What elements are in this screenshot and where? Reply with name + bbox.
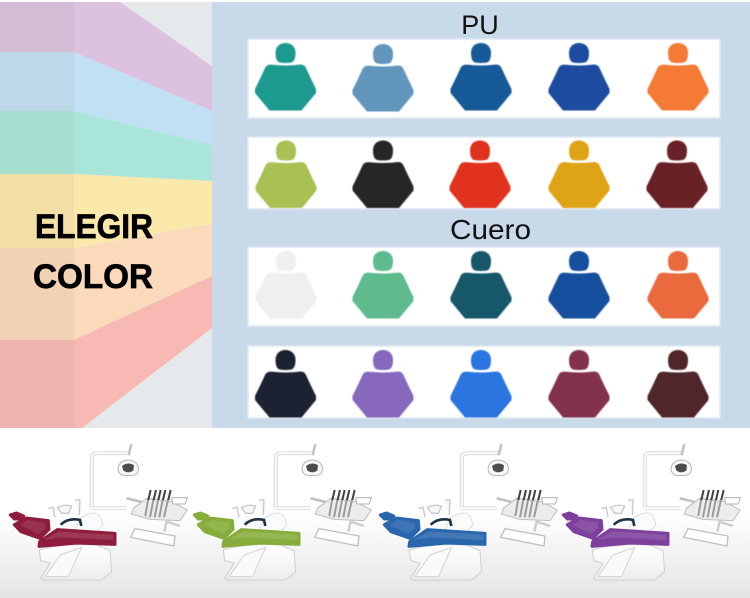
swatch: coral — [648, 251, 708, 318]
dental chair: purple — [563, 444, 740, 580]
swatch: deep teal — [450, 251, 512, 318]
swatch: red — [450, 140, 510, 208]
swatch: wine — [548, 350, 610, 418]
swatch: steel blue — [352, 44, 414, 112]
swatch: maroon — [646, 140, 708, 208]
dental chair: blue — [380, 444, 557, 580]
swatch: mustard — [548, 140, 610, 208]
heading: ELEGIR COLOR: ELEGIR — [35, 208, 153, 246]
panel: PU row 1 — [248, 39, 720, 118]
heading: Cuero: Cuero — [450, 214, 531, 245]
panel: colour ribbon — [0, 2, 212, 428]
swatch: violet — [352, 350, 414, 418]
swatch: lime — [256, 140, 316, 208]
panel: colour options background — [212, 2, 750, 428]
heading: ELEGIR COLOR: COLOR — [33, 258, 153, 296]
panel: PU row 2 — [248, 137, 720, 209]
heading: ELEGIR COLOR — [33, 208, 153, 296]
swatch: black — [352, 140, 414, 208]
swatch: royal blue — [548, 43, 610, 110]
panel: Cuero row 2 — [248, 346, 720, 418]
swatch: off white — [256, 251, 316, 318]
swatch: bright blue — [450, 350, 512, 418]
swatch: dark blue — [450, 43, 512, 110]
swatch: cobalt — [548, 251, 610, 318]
bottom white floor background — [0, 428, 750, 598]
swatch: teal — [255, 43, 316, 110]
swatch: orange — [648, 43, 708, 110]
swatch: mint green — [352, 251, 414, 318]
swatch: navy black — [255, 350, 316, 418]
heading: PU: PU — [461, 10, 499, 40]
swatch: dark brown — [648, 350, 708, 418]
dental chair: burgundy — [10, 444, 187, 580]
panel: Cuero row 1 — [248, 247, 720, 326]
dental chair: green — [194, 444, 371, 580]
